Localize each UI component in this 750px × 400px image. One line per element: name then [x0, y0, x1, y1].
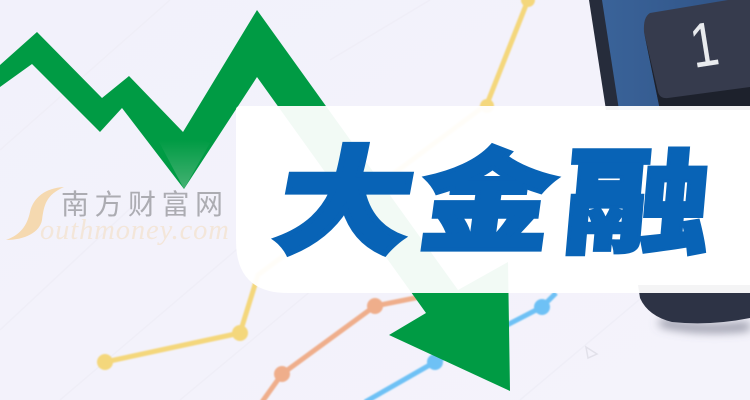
calculator body edge — [589, 0, 620, 110]
watermark Chinese name: 南方财富网 — [61, 189, 229, 221]
calculator key — [644, 0, 750, 110]
chart line: blue — [365, 293, 556, 400]
watermark swoosh — [6, 187, 64, 240]
key digit: 1 — [685, 8, 723, 81]
watermark domain: outhmoney.com — [40, 215, 230, 246]
chart line: orange — [262, 296, 425, 400]
chart line: yellow — [97, 0, 535, 370]
green zigzag arrow — [0, 10, 510, 391]
title: 金 — [412, 114, 566, 273]
title: 大 — [266, 110, 429, 276]
watermark — [6, 187, 230, 246]
title: 融 — [558, 111, 720, 278]
calculator blue panel — [602, 0, 750, 110]
title — [266, 110, 720, 278]
title panel — [236, 106, 750, 293]
calculator base below panel — [660, 322, 750, 328]
calculator — [589, 0, 750, 328]
faint triangle mark — [586, 347, 597, 358]
